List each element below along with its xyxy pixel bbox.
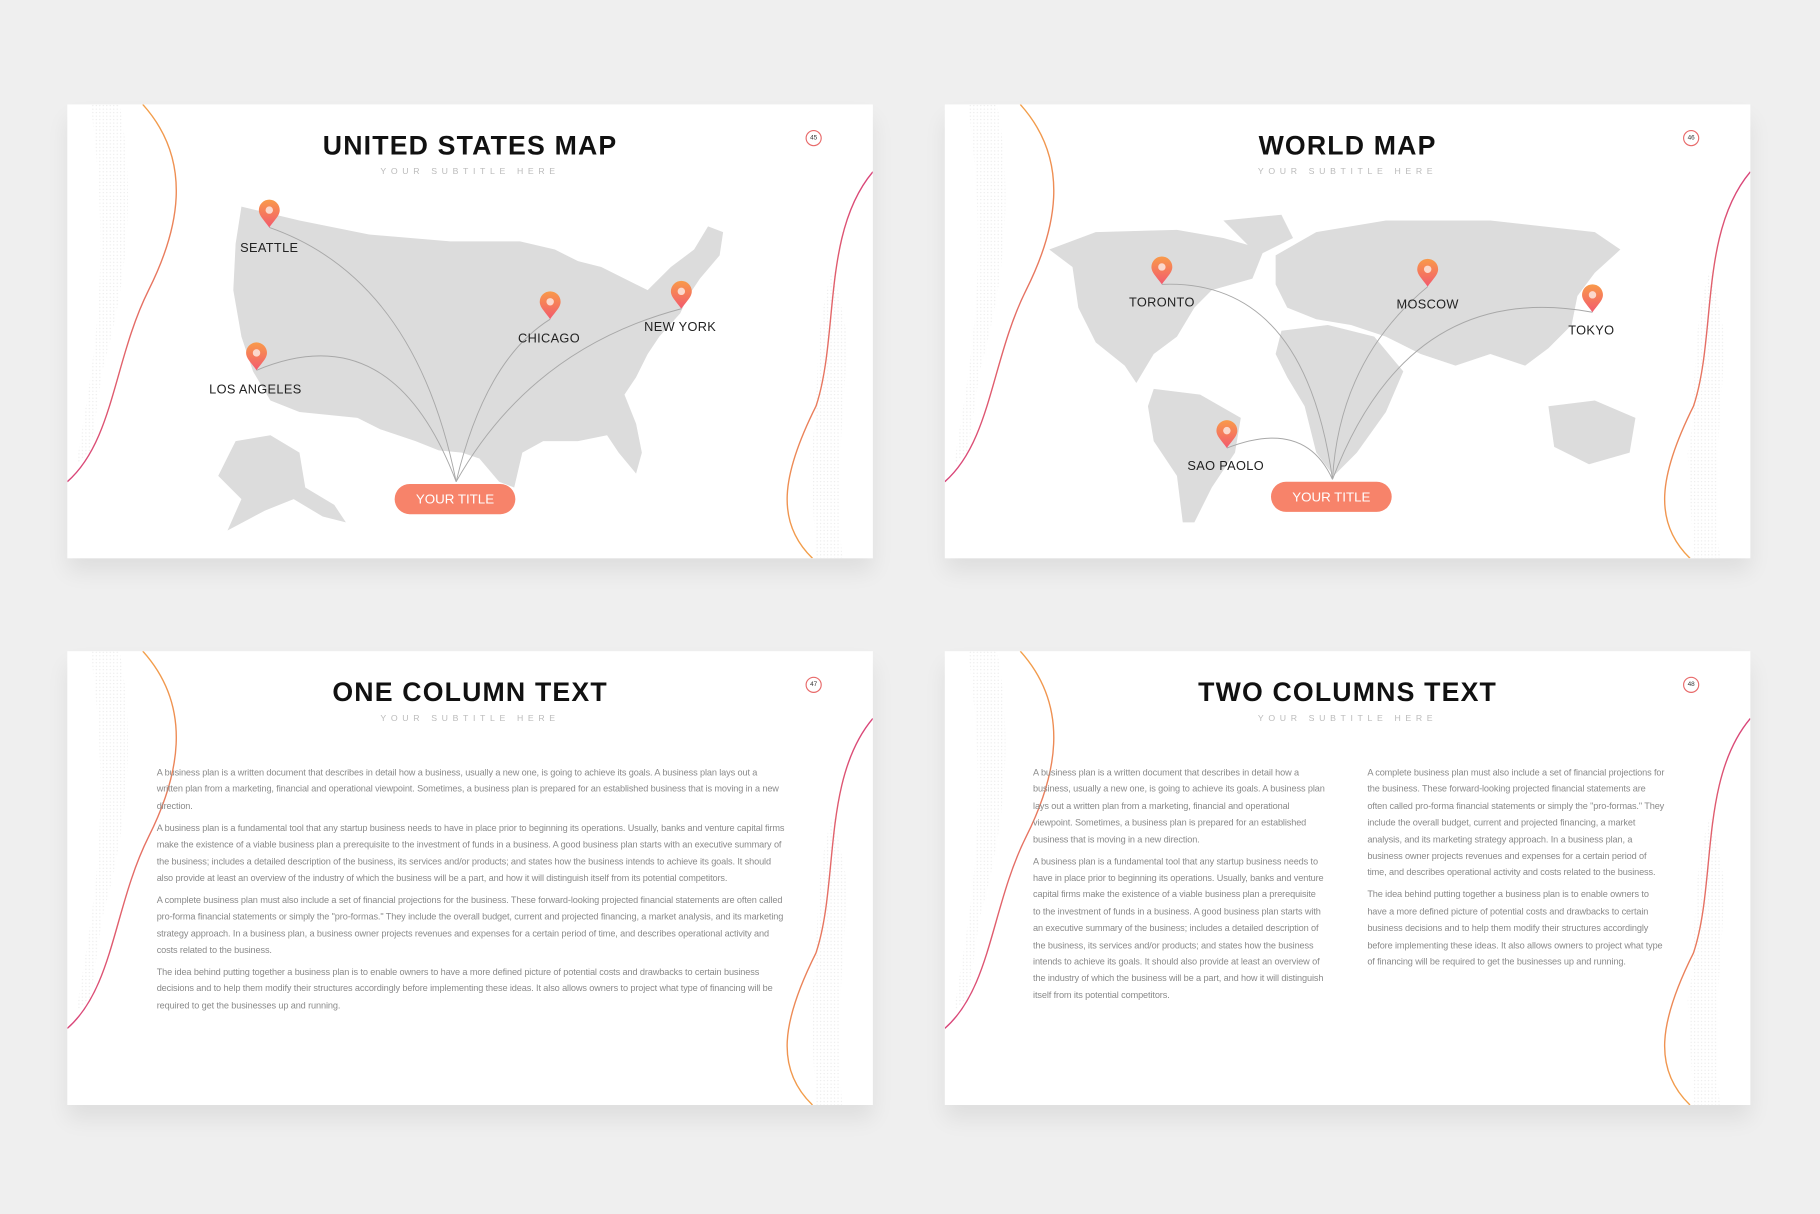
- city labels: TORONTO: [1129, 294, 1195, 309]
- panel: two columns text: YOUR SUBTITLE HERE: [1258, 713, 1437, 723]
- panel: united states map: UNITED STATES MAP: [323, 130, 617, 160]
- panel: two columns text: TWO COLUMNS TEXT: [1198, 677, 1497, 707]
- text column left: A business plan is a written document that describes in detail how a business, usually a new one, is going to achieve its goals. A business plan lays out a written plan from a marketing, financial and operational viewpoint. Sometimes, a business plan is prepared for an established business that is moving in a new direction.: [1033, 767, 1325, 845]
- city labels: CHICAGO: [518, 330, 580, 345]
- panel: world map: WORLD MAP: [1259, 130, 1437, 160]
- panel: one column text: ONE COLUMN TEXT: [332, 677, 608, 707]
- connection curves: [257, 227, 681, 482]
- text block: A complete business plan must also include a set of financial projections for the business. These forward-looking projected financial statements are often called pro-forma financial statements or simply the "pro-formas." They include the overall budget, current and projected financing, a market analysis, and its marketing strategy approach. In a business plan, a business owner projects revenues and expenses for a certain period of time, and describes operational activity and costs related to the business.: [157, 895, 783, 955]
- city labels: SAO PAOLO: [1187, 458, 1264, 473]
- text block: A business plan is a fundamental tool that any startup business needs to have in place prior to beginning its operations. Usually, banks and venture capital firms make the existence of a viable business plan a prerequisite to the investment of funds in a business. A good business plan starts with an executive summary of the business; includes a detailed description of the business, its services and/or products; and states how the business intends to achieve its goals. It should also provide at least an overview of the industry of which the business will be a part, and how it will distinguish itself from its potential competitors.: [157, 823, 784, 883]
- text column right: A complete business plan must also include a set of financial projections for the business. These forward-looking projected financial statements are often called pro-forma financial statements or simply the "pro-formas." They include the overall budget, current and projected financing, a market analysis, and its marketing strategy approach. In a business plan, a business owner projects revenues and expenses for a certain period of time, and describes operational activity and costs related to the business.: [1367, 767, 1664, 878]
- map: world: [1049, 215, 1635, 522]
- city labels: LOS ANGELES: [209, 381, 302, 396]
- text column right: [1367, 767, 1664, 967]
- panel: world map: YOUR SUBTITLE HERE: [1258, 166, 1437, 176]
- city labels: SEATTLE: [240, 240, 298, 255]
- pins: [1151, 257, 1172, 284]
- panel: two columns text: [945, 651, 1750, 1105]
- button: your title: YOUR TITLE: [416, 492, 494, 507]
- text block: The idea behind putting together a business plan is to enable owners to have a more defined picture of potential costs and drawbacks to certain business decisions and to help them modify their structures accordingly before implementing these ideas. It also allows owners to project what type of financing will be required to get the businesses up and running.: [157, 967, 773, 1011]
- panel: united states map: YOUR SUBTITLE HERE: [380, 166, 560, 176]
- city labels: TOKYO: [1568, 322, 1614, 337]
- panel: world map: 46: [1688, 135, 1695, 142]
- city labels: MOSCOW: [1397, 297, 1459, 312]
- panel: world map: [945, 104, 1750, 558]
- panel: one column text: [67, 651, 873, 1105]
- text column left: A business plan is a fundamental tool that any startup business needs to have in place prior to beginning its operations. Usually, banks and venture capital firms make the existence of a viable business plan a prerequisite to the investment of funds in a business. A good business plan starts with an executive summary of the business; includes a detailed description of the business, its services and/or products; and states how the business intends to achieve its goals. It should also provide at least an overview of the industry of which the business will be a part, and how it will distinguish itself from its potential competitors.: [1033, 856, 1324, 1000]
- panel: united states map: 45: [810, 135, 817, 142]
- button: your title: [1271, 482, 1392, 512]
- city labels: NEW YORK: [644, 319, 716, 334]
- button: your title: YOUR TITLE: [1292, 489, 1371, 504]
- panel: one column text: 47: [810, 681, 817, 688]
- button: your title: [395, 484, 515, 514]
- city labels: [209, 240, 716, 396]
- panel: one column text: YOUR SUBTITLE HERE: [380, 713, 560, 723]
- text block: A business plan is a written document that describes in detail how a business, usually a new one, is going to achieve its goals. A business plan lays out a written plan from a marketing, financial and operational viewpoint. Sometimes, a business plan is prepared for an established business that is moving in a new direction.: [157, 767, 779, 811]
- map: USA: [218, 207, 723, 530]
- city labels: [1129, 294, 1614, 473]
- connection curves: [1162, 284, 1592, 479]
- pins: [259, 200, 280, 227]
- panel: united states map: [67, 104, 873, 558]
- text block: [156, 767, 784, 1011]
- text column right: The idea behind putting together a business plan is to enable owners to have a more defined picture of potential costs and drawbacks to certain business decisions and to help them modify their structures accordingly before implementing these ideas. It also allows owners to project what type of financing will be required to get the businesses up and running.: [1367, 890, 1663, 967]
- panel: two columns text: 48: [1688, 681, 1695, 688]
- text column left: [1033, 767, 1325, 1000]
